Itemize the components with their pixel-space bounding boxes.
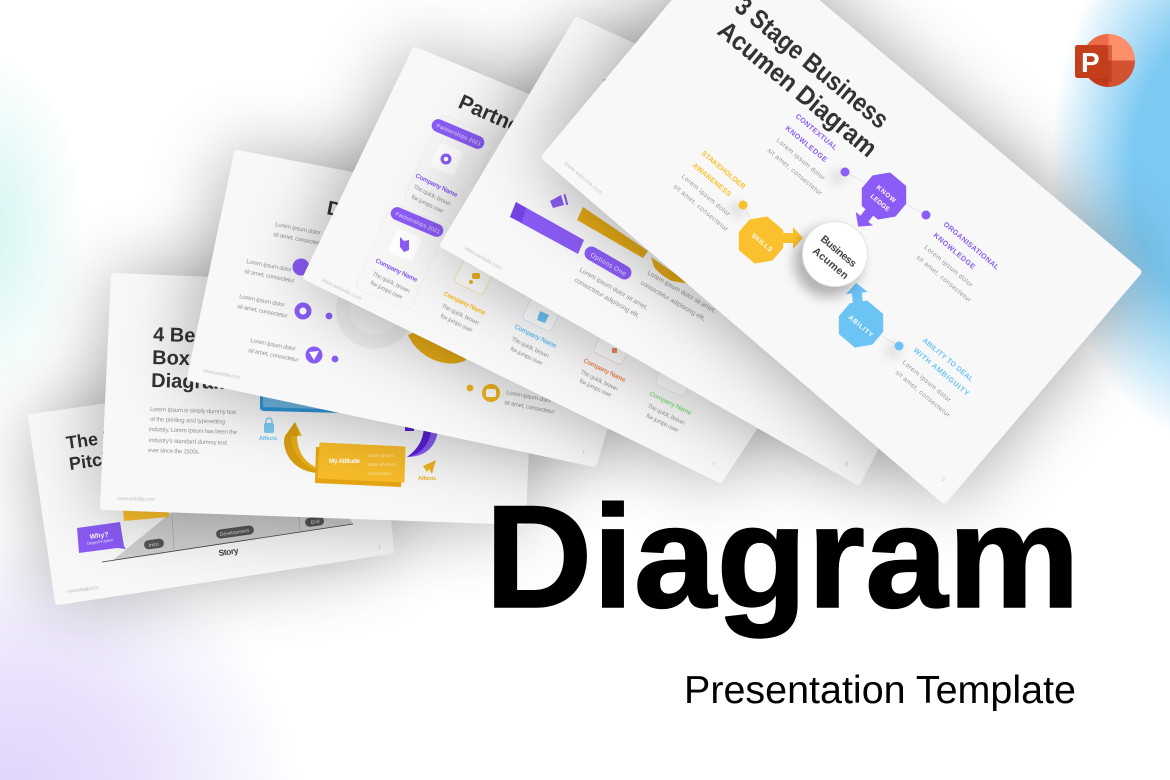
- blue box: [260, 375, 345, 413]
- partner card two: [354, 202, 448, 312]
- slide 2: 4 best box diagram: [100, 273, 535, 525]
- slide 4: partners: [303, 47, 880, 483]
- orange partner: Company Name: [582, 358, 627, 384]
- slide 1 title: Pitch Deck: [68, 441, 163, 474]
- slide 1 title: [65, 423, 163, 474]
- icon: plane and affects: [418, 460, 436, 482]
- slide 2 paragraph: ever since the 1500s.: [148, 448, 200, 456]
- yellow partner: Company Name: [442, 291, 487, 317]
- my attitude box: [315, 443, 405, 487]
- centre circle: business acumen: Business: [818, 233, 859, 270]
- slide 3 left text: Lorem ipsum dolor: [239, 294, 285, 309]
- green partner: The quick, brown: [646, 403, 686, 427]
- arrow: ability to centre: [845, 282, 869, 305]
- slide 1 number: 1: [378, 545, 381, 551]
- pill: options one: Options One: [589, 252, 627, 278]
- partner card two: The quick, brown: [371, 271, 411, 295]
- my attitude box: My Attitude: [329, 458, 360, 465]
- slide 3 left text: sit amet, consectetur: [248, 348, 299, 364]
- slide 2 title: Box: [152, 347, 190, 370]
- slide 3 left text: Lorem ipsum dolor: [246, 259, 292, 274]
- text: contextual knowledge: sit amet, consectetur: [766, 147, 824, 197]
- slide 2 paragraph: of the printing and typesetting: [150, 417, 225, 426]
- text: organisational knowledge: sit amet, consectetur: [915, 254, 973, 304]
- pill: options one: [582, 244, 634, 282]
- icon: purple circle one: [294, 302, 312, 320]
- partner card one: The quick, brown: [412, 184, 452, 208]
- slide 2 paragraph: industry's standard dummy text: [149, 438, 227, 447]
- hexagon: know ledge: [854, 166, 914, 226]
- slide 1 title: The Best: [65, 423, 143, 453]
- slide 3 left text: Lorem ipsum dolor: [275, 222, 321, 237]
- text: stakeholder awareness: [672, 149, 748, 233]
- green partner: [645, 355, 697, 434]
- why callout: Origin/Problem: [86, 537, 114, 546]
- partner card one: fox jumps over: [410, 194, 444, 215]
- slide 3 left text: [237, 222, 324, 364]
- icon: megaphone: [550, 194, 568, 208]
- slide 2 paragraph: industry. Lorem Ipsum has been the: [149, 427, 238, 436]
- blue partner: Company Name: [513, 324, 558, 350]
- text: contextual knowledge: Lorem ipsum dolor: [775, 137, 827, 182]
- text: ability to deal with ambiguity: sit amet, consectetur: [894, 369, 952, 419]
- slide 3 number: 1: [582, 450, 585, 456]
- option bar purple: [510, 202, 584, 254]
- purple curved arrow: [405, 425, 438, 457]
- slide 6 number: 2: [942, 477, 945, 483]
- slide 2 paragraph: Lorem Ipsum is simply dummy text: [150, 407, 236, 416]
- option text block two: Lorem ipsum dolor sit amet,: [646, 270, 717, 315]
- my attitude box: dolor sit amet,: [368, 462, 396, 467]
- slide 3 footer: www.website.com: [202, 368, 241, 381]
- slide 5 footer: www.website.com: [462, 245, 503, 272]
- icon: lock and affects: [259, 418, 277, 442]
- why callout: [77, 522, 126, 553]
- hexagon: skills: SKILLS: [750, 232, 774, 254]
- centre circle: business acumen: [794, 222, 868, 297]
- icon: PowerPoint logo: P: [1081, 47, 1100, 78]
- slide 2 title: [151, 324, 231, 394]
- yellow row text: Lorem ipsum dolor: [506, 390, 552, 405]
- subtitle: Presentation Template: Presentation Template: [684, 669, 1076, 712]
- option text block one: consectetur adipiscing elit,: [573, 277, 641, 320]
- blue partner: The quick, brown: [510, 336, 550, 360]
- slide 3 left text: sit amet, consectetur: [244, 269, 295, 285]
- text: organisational knowledge: [915, 220, 1002, 304]
- my attitude box: consectetur: [368, 471, 392, 476]
- slide 5 number: 8: [845, 462, 848, 468]
- green partner: fox jumps over: [645, 413, 679, 434]
- yellow row text: [504, 390, 555, 416]
- partner card one: [403, 114, 497, 224]
- blue partner: fox jumps over: [509, 346, 543, 367]
- option text block two: consectetur adipiscing elit,: [639, 280, 707, 323]
- icon: lock and affects: Affects: [259, 436, 277, 442]
- slide 3 left text: Lorem ipsum dolor: [250, 338, 296, 353]
- connector lines: [743, 172, 926, 346]
- text: contextual knowledge: CONTEXTUAL: [794, 112, 840, 152]
- yellow partner: The quick, brown: [440, 303, 480, 327]
- orange partner: The quick, brown: [579, 369, 619, 393]
- slide 3 left text: sit amet, consectetur: [237, 304, 288, 320]
- dots with soft shadow: [731, 168, 930, 357]
- slide 6: 3 stage business acumen diagram: [542, 0, 1141, 503]
- text: organisational knowledge: KNOWLEDGE: [932, 231, 977, 271]
- slide 4 title: Partners: [455, 91, 542, 146]
- blue partner: [509, 290, 564, 367]
- slide 5: options: [440, 17, 1000, 485]
- text: ability to deal with ambiguity: Lorem ipsum dolor: [901, 359, 953, 404]
- story chart: Intro: [148, 542, 159, 549]
- text: ability to deal with ambiguity: WITH AMBIGUITY: [912, 346, 971, 398]
- partner card one: Partnerships 2021: [435, 123, 482, 148]
- story chart: [102, 500, 353, 562]
- ring chart: [292, 258, 466, 364]
- hexagon: ability: [831, 294, 891, 354]
- slide 2 title: Diagram: [151, 370, 231, 394]
- partner card one: Company Name: [414, 173, 459, 199]
- centre circle: business acumen: Acumen: [810, 245, 851, 282]
- title: Diagram: Diagram: [485, 475, 1080, 638]
- story chart: Development: [219, 528, 250, 538]
- green partner: Company Name: [648, 391, 693, 417]
- hexagon: skills: [731, 210, 791, 270]
- option bar yellow: [577, 207, 690, 284]
- slide 4 footer: www.website.com: [319, 277, 363, 302]
- slide 2 footer: www.website.com: [116, 496, 155, 503]
- partner card two: Company Name: [374, 258, 419, 284]
- text: stakeholder awareness: STAKEHOLDER: [700, 149, 748, 191]
- purple dots: [326, 313, 338, 362]
- hexagon: ability: ABILITY: [847, 314, 875, 339]
- hexagon: know ledge: KNOW: [875, 184, 897, 205]
- partner card two: fox jumps over: [369, 280, 403, 301]
- text: stakeholder awareness: sit amet, consectetur: [672, 183, 730, 233]
- arrow: yellow curved: [284, 422, 318, 473]
- icon: PowerPoint logo: [1075, 34, 1135, 87]
- orange partner: [578, 323, 635, 399]
- text: contextual knowledge: KNOWLEDGE: [784, 124, 829, 164]
- yellow row text: sit amet, consectetur: [504, 400, 555, 416]
- icon: plane and affects: Affects: [418, 476, 436, 482]
- text: contextual knowledge: [766, 112, 840, 197]
- story chart: End: [310, 519, 320, 526]
- text: organisational knowledge: Lorem ipsum dolor: [923, 244, 975, 289]
- text: organisational knowledge: ORGANISATIONAL: [942, 220, 1002, 272]
- option text block one: Lorem ipsum dolor sit amet,: [578, 267, 649, 312]
- slide 2 title: 4 Best: [153, 324, 214, 348]
- slide 6 title: Acumen Diagram: [712, 14, 883, 163]
- slide 1 footer: www.website.com: [66, 585, 99, 595]
- slide 1: pitch story slide: [28, 365, 394, 605]
- yellow partner: fox jumps over: [439, 313, 473, 334]
- text: stakeholder awareness: AWARENESS: [691, 161, 733, 199]
- slide 5 title: Three Options: [594, 75, 736, 171]
- slide 6 footer: www.website.com: [562, 160, 604, 197]
- why callout: Why?: [89, 531, 109, 541]
- slide 3 title: Diagram: [325, 197, 408, 234]
- slide 4 number: 7: [712, 462, 715, 468]
- slide 3 left text: sit amet, consectetur: [273, 232, 324, 248]
- my attitude box: Lorem ipsum: [368, 453, 394, 458]
- orange partner: fox jumps over: [578, 378, 612, 399]
- text: ability to deal with ambiguity: [894, 336, 976, 419]
- slide 2 paragraph: [148, 407, 238, 456]
- arrow: skills to centre: [782, 227, 803, 249]
- text: stakeholder awareness: Lorem ipsum dolor: [680, 173, 732, 218]
- text: ability to deal with ambiguity: ABILITY TO DEAL: [921, 336, 976, 384]
- story chart: Story: [218, 545, 239, 558]
- icon: purple circle two: [306, 346, 322, 364]
- partner card two: Partnerships 2021: [394, 211, 441, 236]
- yellow partner: [439, 253, 496, 334]
- slide 3: D diagram: [187, 150, 665, 467]
- icon: yellow dot and circle: [467, 384, 500, 402]
- arrow: knowledge to centre: [850, 203, 880, 233]
- hexagon: know ledge: LEDGE: [869, 193, 891, 214]
